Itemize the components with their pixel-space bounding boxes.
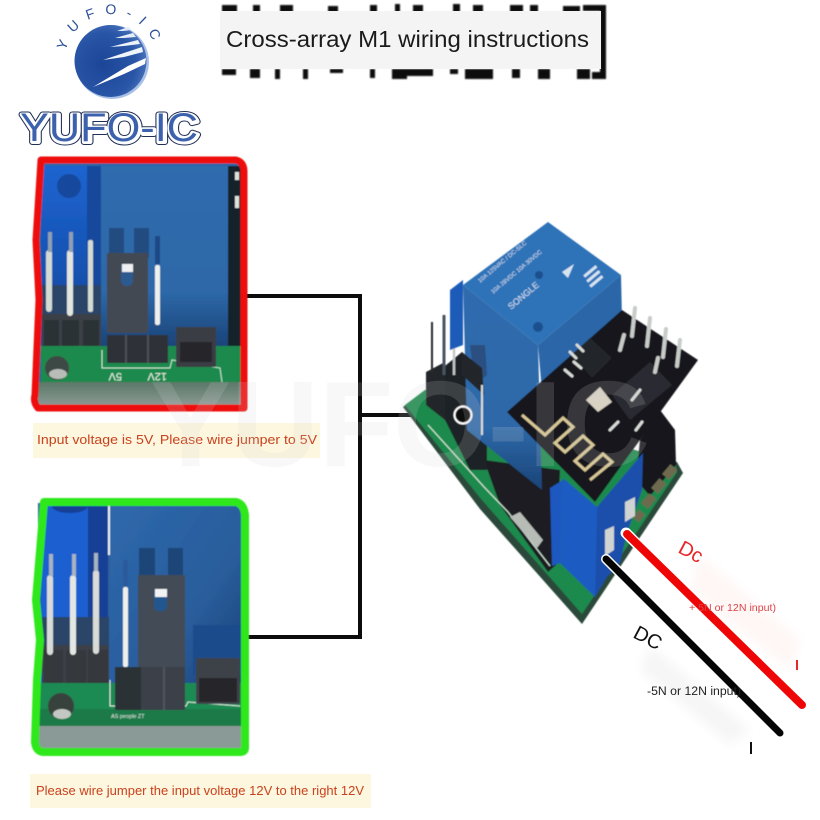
push button bbox=[196, 658, 240, 704]
panel: 5V jumper photo: 12V bbox=[147, 370, 167, 382]
terminal block bbox=[41, 506, 108, 701]
circuit board bbox=[41, 346, 242, 382]
pcb bbox=[403, 390, 683, 624]
title fragments behind the banner bbox=[222, 4, 606, 79]
label: black wire: DC bbox=[630, 622, 665, 655]
logo wordmark: YUFO-IC bbox=[20, 106, 198, 150]
relay markings bbox=[477, 240, 603, 312]
push button bbox=[176, 327, 216, 367]
label: red wire: Dc bbox=[675, 537, 707, 568]
wire entry point bbox=[454, 406, 472, 424]
label: red wire: + 5N or 12N input) bbox=[689, 603, 776, 614]
caption: 5V: Input voltage is 5V, Please wire jumper to 5V bbox=[37, 432, 317, 447]
left pin header bbox=[440, 352, 487, 470]
pin headers bbox=[42, 285, 101, 317]
title banner: Cross-array M1 wiring instructions bbox=[226, 26, 589, 52]
terminal block bbox=[41, 166, 87, 350]
relay top bbox=[463, 222, 621, 345]
relay markings: 10A 28VDC 10A 30VDC bbox=[490, 249, 544, 296]
antenna trace bbox=[522, 415, 612, 480]
relay module bbox=[403, 222, 698, 624]
watermark: YUFO-IC bbox=[150, 356, 650, 492]
terminal block bbox=[550, 480, 563, 566]
logo: arc lettering: YUFO-IC bbox=[56, 4, 160, 48]
pale smudges bbox=[640, 555, 800, 745]
black wire: DC negative bbox=[606, 559, 780, 733]
panel: 5V jumper photo bbox=[34, 160, 244, 408]
title banner bbox=[220, 11, 601, 69]
lower dark components bbox=[484, 460, 560, 572]
jumper and pin in front of relay bbox=[462, 352, 484, 395]
relay body bbox=[110, 507, 241, 697]
module pins bbox=[620, 308, 680, 372]
caption: 12V: Please wire jumper the input voltage 12V to the right 12V bbox=[36, 783, 364, 798]
wifi module board bbox=[507, 310, 698, 502]
pin headers bbox=[42, 617, 109, 647]
relay body bbox=[101, 166, 230, 346]
jumper cap bbox=[138, 575, 185, 667]
circuit board bbox=[40, 683, 241, 709]
label: red wire bbox=[675, 537, 798, 670]
logo wordmark: YUFO-IC bbox=[21, 107, 199, 151]
logo wordmark: YUFO-IC bbox=[21, 107, 199, 151]
jumper cap bbox=[107, 253, 148, 333]
caption: 5V bbox=[33, 423, 320, 458]
caption: 12V bbox=[30, 774, 371, 808]
silkscreen labels: 5V bbox=[108, 370, 122, 382]
red wire: DC positive bbox=[626, 533, 802, 705]
silver switch bbox=[510, 512, 543, 548]
right side dark components bbox=[636, 410, 676, 496]
relay bbox=[463, 285, 542, 490]
panel: 12V jumper photo bbox=[35, 499, 245, 752]
green outline bbox=[35, 502, 245, 752]
panel: 12V jumper photo: AS people ZT bbox=[111, 714, 145, 720]
relay markings: 10A 125VAC / DC-SLC bbox=[477, 240, 529, 285]
connector wires bbox=[246, 296, 462, 637]
logo: globe emblem bbox=[56, 4, 160, 99]
red outline bbox=[34, 160, 244, 408]
label: black wire: -5N or 12N input) bbox=[647, 686, 741, 698]
relay markings: SONGLE bbox=[506, 280, 541, 312]
label: black wire bbox=[630, 622, 752, 754]
